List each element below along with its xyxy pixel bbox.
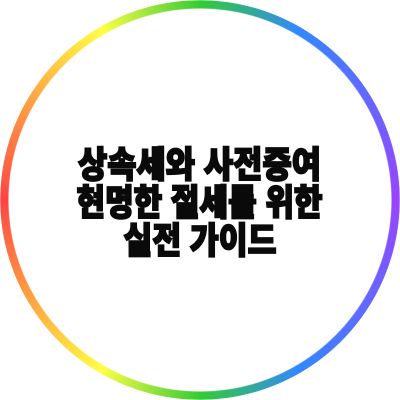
title line 3: 실전 가이드	[124, 220, 276, 261]
title line 2: 현명한 절세를 위한	[76, 182, 322, 223]
title line 1: 상속세와 사전증여	[78, 144, 321, 185]
